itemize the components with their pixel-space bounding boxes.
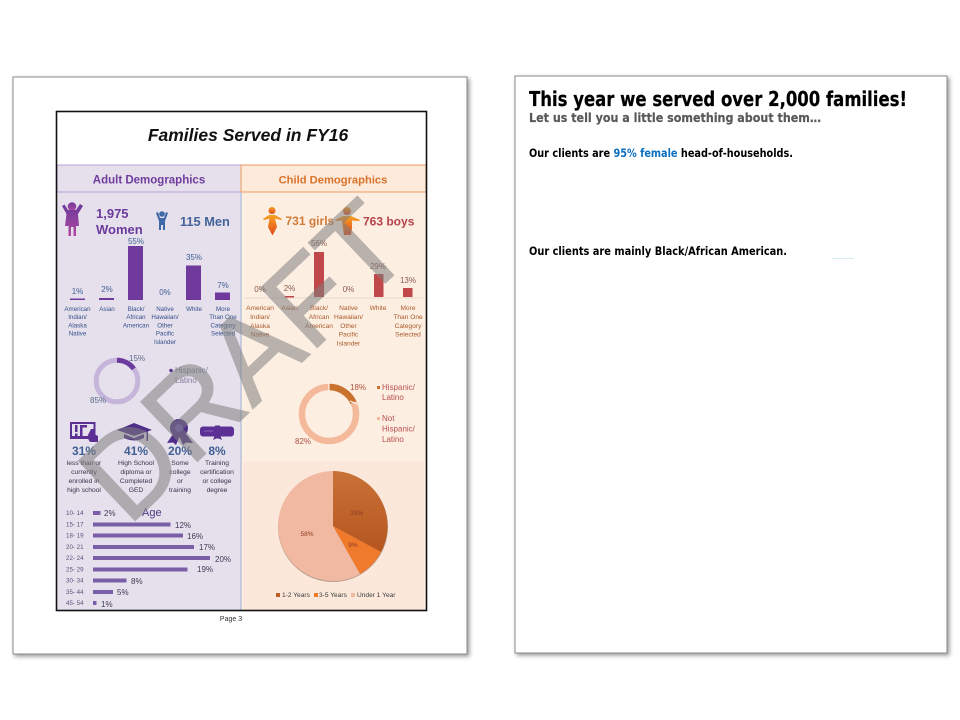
bar chart: age: 10- 14 [66, 510, 84, 517]
text: men count: 115 Men [180, 214, 230, 229]
donut chart: adult ethnicity: Latino [175, 376, 197, 385]
stat: education levels: 8% [208, 444, 226, 458]
bar chart: child race: Hawaiian/ [334, 314, 363, 321]
pie chart: time in program [276, 471, 396, 599]
pie chart: time in program: 58% [300, 531, 314, 538]
bar chart: child race: White [370, 305, 387, 312]
stat: education levels: Some [171, 460, 189, 467]
bar chart: age: 25- 29 [66, 566, 84, 574]
bar chart: adult race: Category [210, 322, 236, 329]
panel: child demographics background [241, 192, 426, 611]
bar chart: child race: Native [251, 332, 270, 339]
watermark: DRAFT: DRAFT [54, 176, 434, 546]
donut chart: adult ethnicity: Hispanic/ [175, 366, 208, 375]
bar chart: adult race: Pacific [156, 331, 174, 338]
title: Families Served in FY16 [148, 125, 348, 145]
stat: education levels: or college [202, 478, 232, 485]
stat: education levels: enrolled in [69, 478, 100, 485]
bar chart: adult race [64, 237, 237, 346]
bar chart: age: 1% [101, 600, 113, 609]
bar chart: adult race: Other [157, 322, 173, 329]
stat: education levels: 31% [72, 444, 96, 458]
panel: left document page [13, 77, 467, 654]
bar chart: adult race: Native [69, 331, 87, 338]
bar chart: adult race: Selected [211, 331, 236, 338]
text: girls count: 731 girls [286, 214, 335, 228]
bar chart: adult race: 1% [72, 287, 83, 296]
bar chart: child race: Native [339, 305, 358, 312]
donut chart: child ethnicity: Latino [382, 393, 404, 402]
text: boys count: 763 boys [363, 214, 415, 228]
donut chart: child ethnicity: 18% [350, 383, 366, 392]
frame around infographic [56, 112, 426, 610]
bar chart: adult race: White [186, 306, 202, 313]
bar chart: adult race: More [216, 306, 230, 313]
bar chart: adult race: Hawaiian/ [151, 314, 179, 321]
faint artifact marks [832, 258, 854, 259]
bar chart: age: 35- 44 [66, 589, 84, 596]
heading: adult demographics: Adult Demographics [93, 174, 205, 186]
donut chart: child ethnicity: 82% [295, 437, 311, 446]
text: women count: 1,975 [96, 206, 129, 221]
text: Black/African American: Our clients are mainly Black/African American. [529, 244, 787, 258]
bar chart: age: 30- 34 [66, 578, 84, 584]
bar chart: child race: Asian [281, 305, 298, 312]
bar chart: adult race: 35% [186, 253, 202, 262]
pie chart: time in program: 3-5 Years [319, 592, 348, 599]
bar chart: age: Age [142, 507, 162, 519]
bar chart: child race: Than One [393, 314, 423, 321]
bar chart: adult race: Asian [99, 306, 115, 313]
bar chart: adult race: 0% [159, 288, 171, 297]
stat: education levels: diploma or [120, 469, 152, 476]
pie chart: time in program: 33% [350, 510, 363, 517]
bar chart: child race: Black/ [310, 305, 328, 312]
donut chart: adult ethnicity: 15% [129, 354, 145, 363]
bar chart: adult race: American [64, 306, 91, 313]
bar chart: age [66, 507, 231, 609]
stat: education levels: GED [129, 487, 143, 494]
bar chart: child race: 0% [343, 285, 354, 294]
stat: education levels: or [177, 478, 184, 485]
divider between columns [240, 192, 242, 611]
stat: education levels: degree [207, 487, 228, 494]
icon: boy [335, 207, 360, 235]
bar chart: adult race: African [126, 314, 146, 321]
bar chart: child race: 2% [284, 284, 295, 293]
bar chart: age: 17% [199, 543, 215, 552]
bar chart: age: 20- 21 [66, 544, 84, 551]
heading: adult demographics [57, 165, 241, 192]
bar chart: age: 22- 24 [66, 555, 84, 562]
stat: education levels: less than or [67, 460, 101, 467]
bar chart: age: 45- 54 [66, 600, 84, 607]
donut chart: adult ethnicity [90, 354, 209, 405]
bar chart: child race: 29% [370, 262, 386, 271]
bar chart: age: 12% [175, 521, 191, 530]
bar chart: adult race: 7% [217, 281, 229, 290]
bar chart: age: 8% [131, 577, 143, 586]
bar chart: child race: Other [340, 323, 358, 330]
stat: education levels: high school [67, 487, 101, 494]
text: women count: Women [96, 222, 143, 237]
panel: adult demographics background [57, 192, 241, 611]
bar chart: adult race: Than One [209, 314, 237, 321]
bar chart: child race: Category [395, 323, 422, 330]
bar chart: child race [245, 239, 423, 348]
bar chart: adult race: Alaska [68, 322, 87, 329]
stat: education levels [67, 444, 234, 494]
bar chart: age: 18- 19 [66, 532, 84, 540]
stat: education levels: certification [200, 469, 234, 476]
bar chart: child race: Indian/ [250, 314, 270, 321]
icon: man [156, 211, 168, 230]
bar chart: child race: Pacific [339, 332, 359, 339]
bar chart: age: 15- 17 [66, 522, 84, 528]
text: women count [96, 206, 143, 237]
donut chart: child ethnicity: Not [382, 414, 394, 423]
stat: education levels: training [169, 487, 191, 494]
panel: tenure chart background [243, 462, 424, 610]
bar chart: adult race: Islander [154, 339, 176, 346]
bar chart: adult race: Native [156, 306, 174, 313]
bar chart: age: 20% [215, 555, 231, 564]
bar chart: child race: 0% [254, 285, 266, 294]
bar chart: adult race: 55% [128, 237, 144, 246]
bar chart: age: 19% [197, 565, 213, 574]
pie chart: time in program: 1-2 Years [282, 592, 311, 599]
icon: award ribbon [167, 419, 193, 445]
bar chart: adult race: American [123, 322, 150, 329]
bar chart: age: 2% [104, 509, 116, 518]
stat: education levels: 20% [168, 444, 192, 458]
donut chart: child ethnicity [295, 383, 416, 446]
stat: education levels: currently [71, 469, 97, 476]
bar chart: child race: African [309, 314, 330, 321]
bar chart: child race: Selected [395, 332, 421, 339]
text: female head of households: Our clients are 95% female head-of-households. [529, 146, 793, 160]
bar chart: child race: American [246, 305, 274, 312]
bar chart: child race: Alaska [250, 323, 270, 330]
bar chart: adult race: 2% [101, 285, 113, 294]
pie chart: time in program: Under 1 Year [357, 592, 396, 599]
stat: education levels: Completed [120, 478, 152, 485]
heading: child demographics: Child Demographics [279, 174, 387, 186]
stat: education levels: High School [118, 460, 154, 467]
donut chart: child ethnicity: Hispanic/ [382, 424, 416, 434]
donut chart: child ethnicity: Hispanic/ [382, 383, 415, 392]
bar chart: adult race: Indian/ [68, 314, 87, 321]
icon: graduation cap [117, 423, 152, 441]
donut chart: adult ethnicity: 85% [90, 396, 106, 405]
bar chart: adult race: Black/ [128, 306, 144, 313]
donut chart: child ethnicity: Latino [382, 435, 404, 444]
bar chart: child race: 56% [311, 239, 327, 248]
bar chart: age: 5% [117, 588, 129, 597]
stat: education levels: 41% [124, 444, 148, 458]
panel: right document page [515, 76, 947, 653]
icon: woman [62, 202, 83, 236]
bar chart: age: 16% [187, 532, 203, 541]
icon: diploma scroll [200, 426, 234, 440]
heading: child demographics [241, 165, 426, 192]
stat: education levels: Training [205, 460, 229, 467]
subheading: Let us tell you a little something about them… [529, 110, 821, 125]
stat: education levels: college [169, 469, 191, 476]
bar chart: child race: American [305, 323, 333, 330]
icon: less than high school [70, 423, 98, 442]
icon: girl [263, 207, 282, 236]
pie chart: time in program: 9% [348, 542, 358, 549]
bar chart: child race: More [400, 305, 416, 312]
bar chart: child race: 13% [400, 276, 416, 285]
bar chart: child race: Islander [337, 341, 361, 348]
page number: Page 3 [220, 616, 242, 623]
